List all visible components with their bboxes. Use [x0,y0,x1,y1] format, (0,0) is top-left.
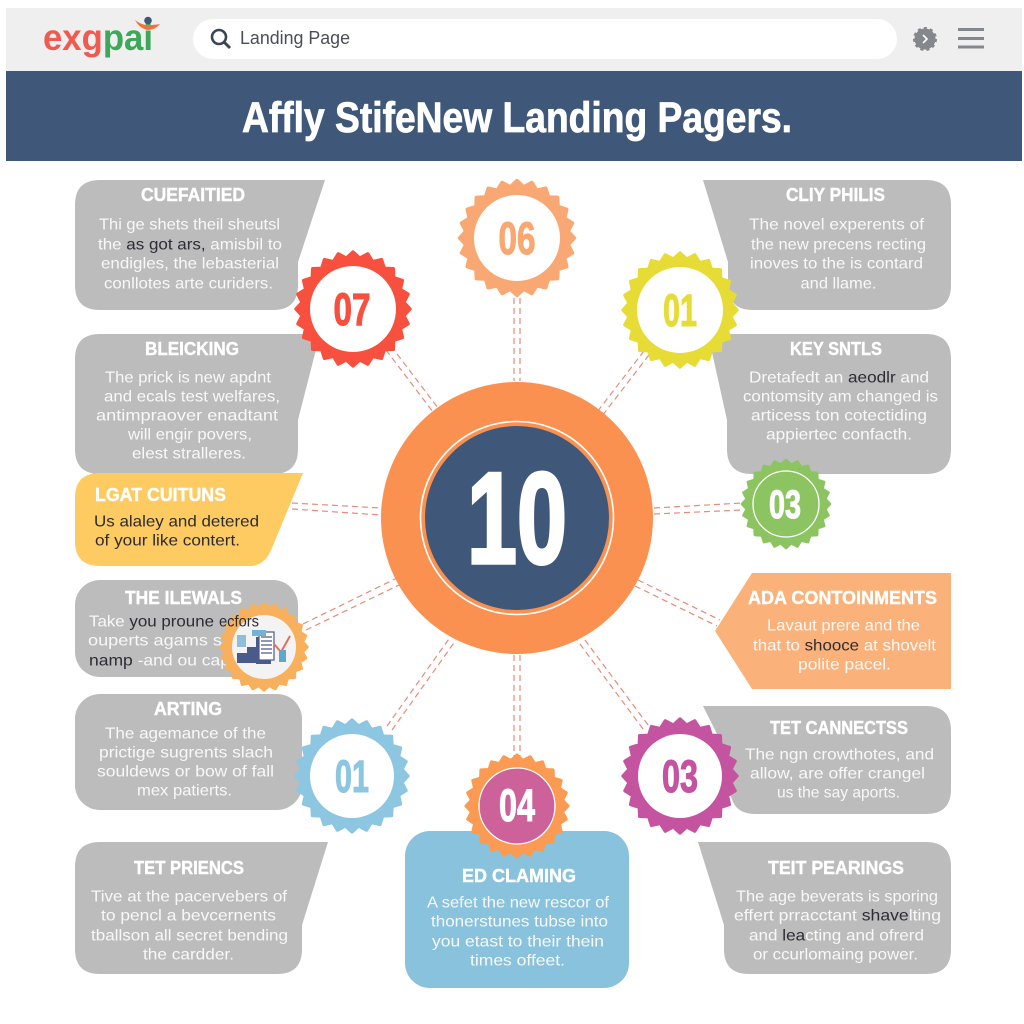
panel: Key Sntls: articess ton cotectiding [751,408,927,424]
badge: document icon [219,604,308,690]
search bar [193,19,897,59]
panel: Ada Contoinments: Lavaut prere and the [767,618,920,634]
panel: Tet Priencs: tballson all secret bending [91,928,288,944]
top navigation bar [6,8,1022,71]
title banner [6,71,1022,161]
panel: The Ilewals: THE ILEWALS [125,587,242,608]
badge: 07 [296,252,410,366]
panel: Arting: ARTING [154,698,222,719]
panel: Ada Contoinments: ADA CONTOINMENTS [748,587,937,608]
panel: Key Sntls: contomsity am changed is [743,388,938,406]
panel: Cliy Philis: The novel experents of [749,216,925,234]
panel: Tet Priencs: Tive at the pacervebers of [91,888,288,906]
panel: Tet Priencs [75,842,328,974]
badge: 01 yellow: 01 [663,285,697,336]
panel: Ed Claming: thonerstunes tubse into [431,914,608,930]
badge: 03 purple [623,719,737,833]
panel: Bleicking: and ecals test welfares, [104,388,280,406]
panel: Tet Cannectss [703,706,951,814]
panel: Ada Contoinments: polite pacel. [798,656,891,674]
center hub: number 10 [381,382,653,654]
panel: Cliy Philis [703,180,951,310]
panel: Tet Priencs: TET PRIENCS [134,857,244,878]
panel: Bleicking: antimpraover enadtant [96,408,279,424]
overlapping text fragment: ecfors [219,614,259,630]
panel: Cliy Philis: CLIY PHILIS [786,184,885,205]
center hub: number 10: 10 [467,445,567,591]
panel: Tet Priencs: to pencl a bevcernents [101,908,276,924]
panel: Ada Contoinments: that to shooce at shovelt [753,638,937,654]
panel: Teit Pearings: TEIT PEARINGS [768,857,904,878]
panel: Bleicking: BLEICKING [145,338,239,359]
panel: Key Sntls: Dretafedt an aeodlr and [749,370,929,386]
badge: 01 yellow [623,253,737,367]
badge: 01 blue [296,720,408,832]
badge: 04 [466,755,568,857]
title banner: Affly StifeNew Landing Pagers. [242,94,792,142]
panel: Bleicking: will engir povers, [127,426,252,444]
panel: Teit Pearings: effert prracctant shave lting [734,908,941,924]
badge: 06: 06 [498,213,536,264]
connector lines [292,298,742,757]
panel: Arting: prictige sugrents slach [99,744,273,762]
panel: Lgat Cuituns [75,473,303,566]
panel: Cuefaitied: conllotes arte curiders. [104,276,273,292]
badge: 03 green [742,460,830,548]
panel: Cliy Philis: the new precens recting [751,236,926,254]
panel: Cuefaitied: the as got ars, amisbil to [98,236,282,254]
panel: Tet Cannectss: TET CANNECTSS [770,717,908,738]
panel: Ed Claming: ED CLAMING [462,865,576,886]
panel: Lgat Cuituns: Us alaley and detered [94,514,259,530]
panel: Key Sntls: KEY SNTLS [790,338,882,359]
panel: The Ilewals [75,580,298,677]
panel: Tet Cannectss: allow, are offer crangel [750,766,925,782]
panel: Ed Claming: times offeet. [470,952,565,970]
panel: Bleicking [75,334,320,474]
panel: Key Sntls [708,334,951,474]
panel: The Ilewals: ouperts agams s [88,632,222,650]
panel: Key Sntls: appiertec confacth. [766,426,912,444]
icon: hamburger menu [958,30,984,47]
panel: Lgat Cuituns: LGAT CUITUNS [95,484,226,505]
panel: Teit Pearings: or ccurlomaing power. [753,946,918,964]
panel: Arting: souldews or bow of fall [97,764,274,780]
panel: Ada Contoinments [715,573,951,689]
panel: Teit Pearings: The age beverats is sporing [736,888,938,906]
panel: Ed Claming: you etast to their thein [432,934,604,950]
panel: Cuefaitied [75,180,325,310]
panel: Tet Priencs: the cardder. [143,946,234,964]
panel: Cuefaitied: Thi ge shets theil sheutsl [99,216,280,234]
panel: Arting [75,694,302,810]
panel: Tet Cannectss: us the say aports. [777,784,900,802]
panel: Arting: The agemance of the [105,726,266,742]
logo: exgpai [43,17,153,58]
badge: 01 blue: 01 [335,751,369,802]
panel: Teit Pearings: and leacting and ofrerd [749,928,924,944]
icon: documents and chart [237,630,290,664]
panel: Ed Claming: A sefet the new rescor of [427,894,610,912]
panel: The Ilewals: namp -and ou cap [89,652,230,670]
badge: 04: 04 [499,780,535,831]
search bar: Landing Page [240,28,350,48]
panel: Tet Cannectss: The ngn crowthotes, and [745,746,934,764]
badge: 03 green: 03 [769,483,801,527]
panel: Cliy Philis: and llame. [800,276,876,292]
panel: Lgat Cuituns: of your like contert. [95,532,240,550]
badge: 07: 07 [334,284,370,335]
panel: Cuefaitied: CUEFAITIED [141,184,245,205]
icon: settings gear [914,28,936,50]
panel: Ed Claming [405,831,629,988]
panel: Bleicking: The prick is new apdnt [105,370,272,386]
panel: Bleicking: elest stralleres. [132,446,246,462]
panel: The Ilewals: Take you proune [89,614,214,630]
panel: Cliy Philis: inoves to the is contard [750,256,923,272]
panel: Arting: mex patierts. [137,782,232,800]
panel: Teit Pearings [698,842,951,974]
panel: Cuefaitied: endigles, the lebasterial [101,256,279,272]
badge: 03 purple: 03 [662,751,698,802]
badge: 06 [460,180,574,296]
